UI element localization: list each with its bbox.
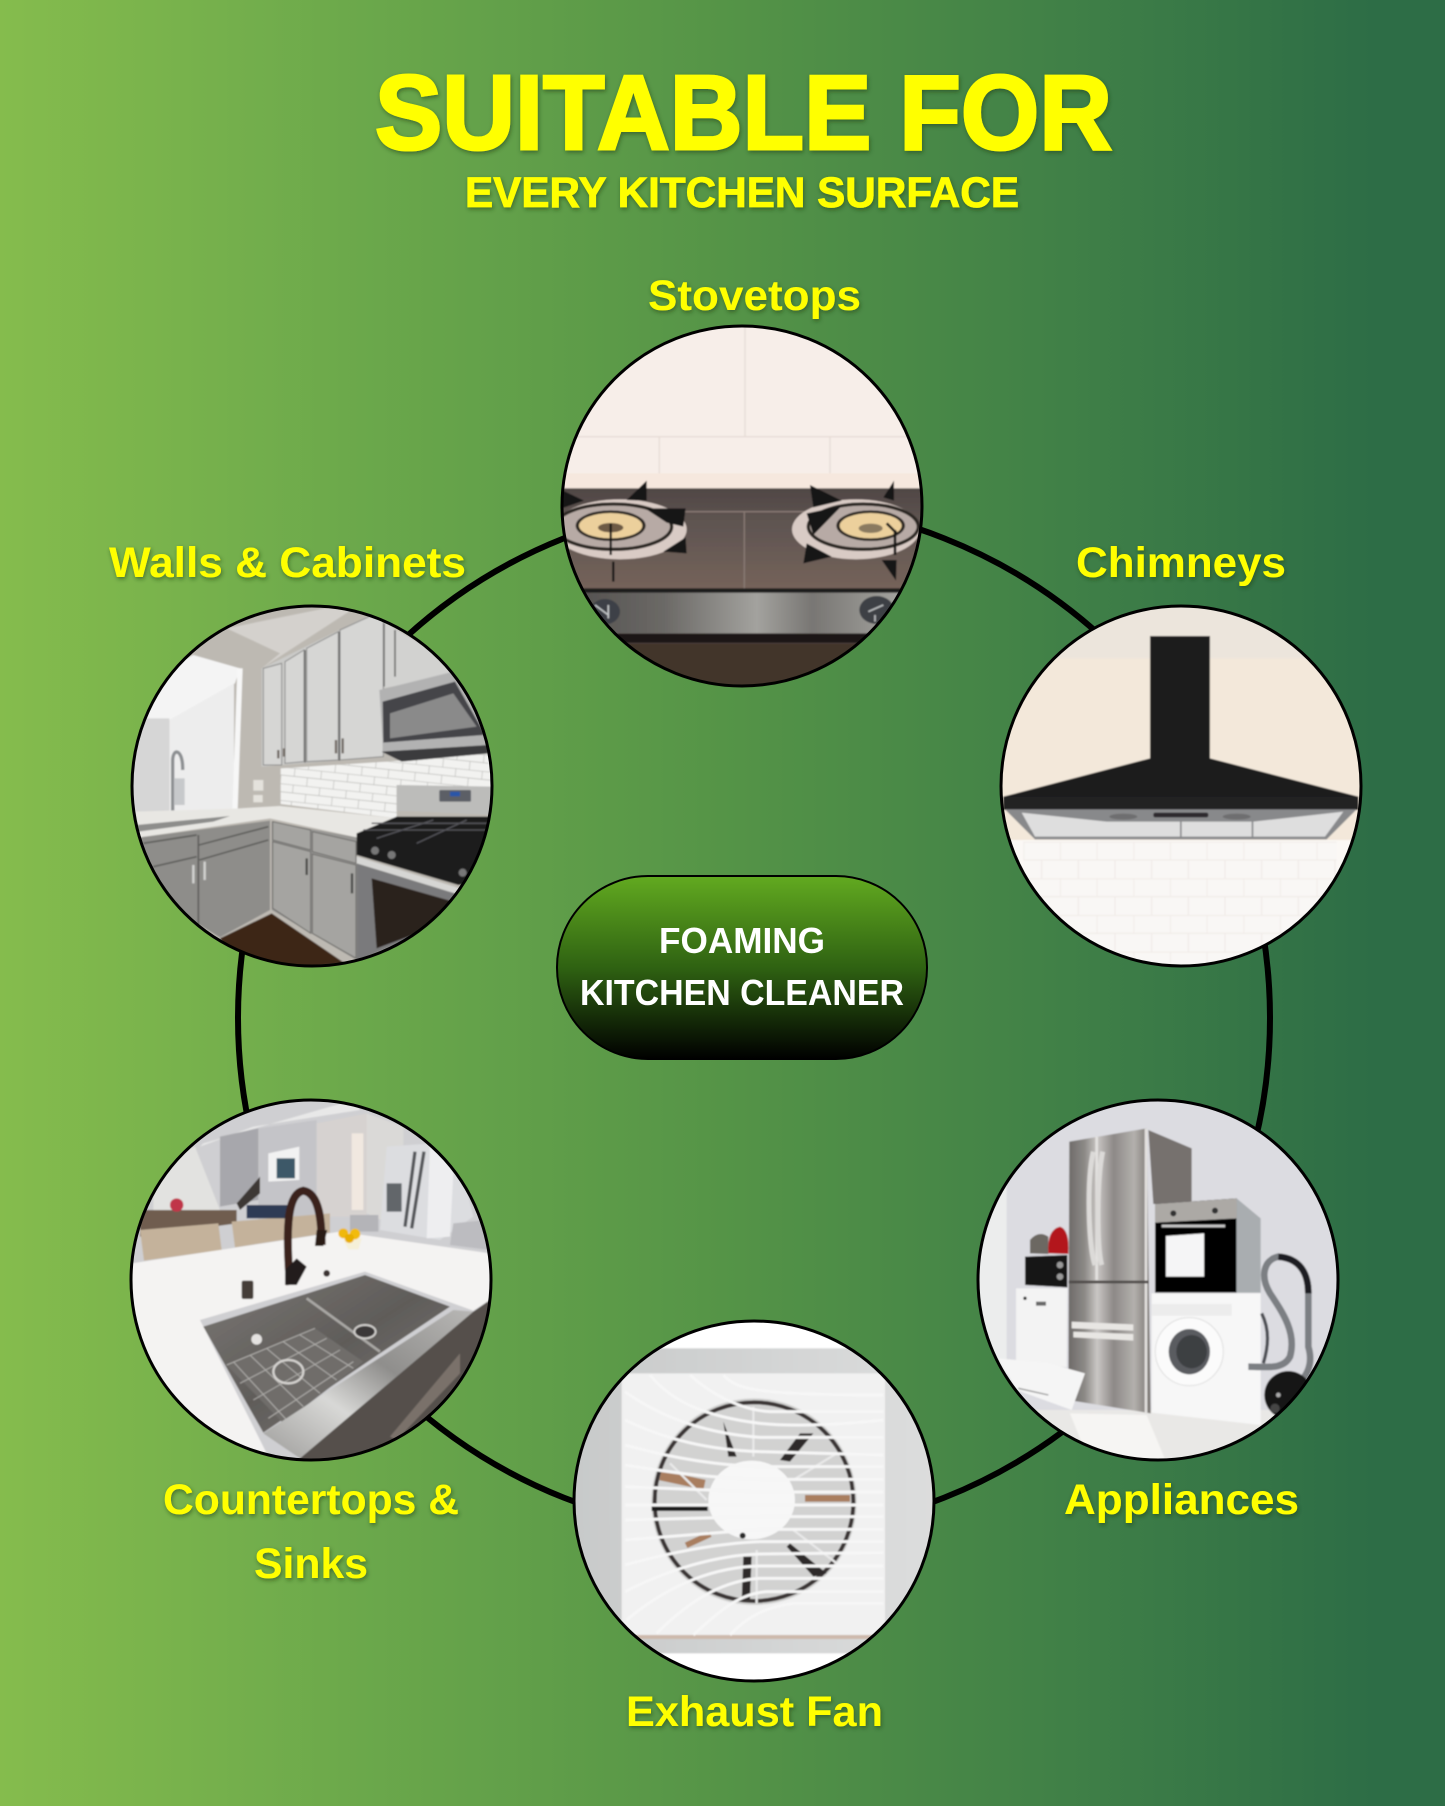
photo: chimney hood xyxy=(1000,604,1362,968)
photo: countertop and sink xyxy=(120,1090,500,1470)
label: appliances: Appliances xyxy=(1064,1476,1299,1524)
label: countertops and sinks xyxy=(163,1476,459,1588)
label: chimneys: Chimneys xyxy=(1076,539,1286,587)
label: exhaust fan: Exhaust Fan xyxy=(626,1688,883,1736)
pill text line 2: KITCHEN CLEANER xyxy=(580,972,904,1013)
photo: stovetop xyxy=(560,324,924,688)
subtitle: EVERY KITCHEN SURFACE xyxy=(465,169,1019,217)
label: countertops and sinks: Sinks xyxy=(254,1540,368,1588)
pill text line 1: FOAMING xyxy=(659,920,825,961)
photo: exhaust fan xyxy=(560,1310,940,1690)
connecting ring xyxy=(238,502,1270,1534)
label: countertops and sinks: Countertops & xyxy=(163,1476,459,1524)
photo: appliances xyxy=(976,1098,1340,1462)
photo: walls and cabinets xyxy=(130,604,494,968)
label: stovetops: Stovetops xyxy=(648,272,861,320)
center pill: foaming kitchen cleaner xyxy=(557,876,927,1059)
title: SUITABLE FOR xyxy=(375,54,1112,172)
label: walls and cabinets: Walls & Cabinets xyxy=(109,539,466,587)
